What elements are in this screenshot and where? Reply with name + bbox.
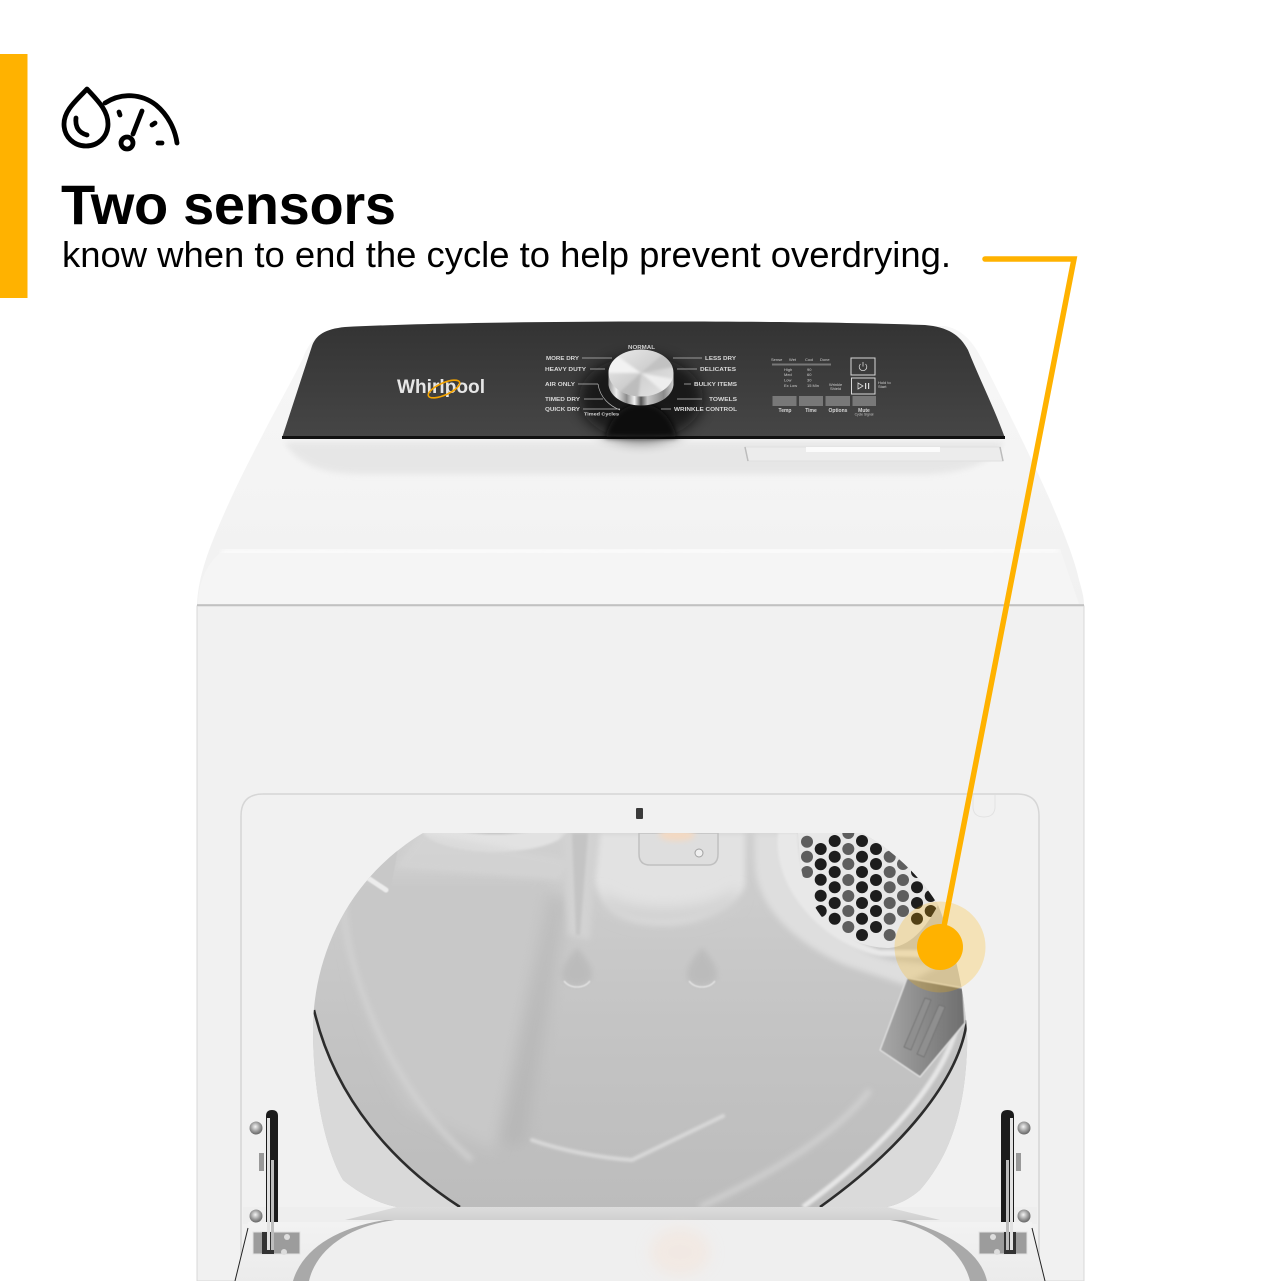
status indicators: Shield xyxy=(830,386,841,391)
option buttons: Time xyxy=(805,408,817,414)
status indicators: 60 xyxy=(807,372,812,377)
cycle labels left xyxy=(545,356,620,416)
status indicators: Cool xyxy=(805,357,813,362)
subheading text: know when to end the cycle to help prevent overdrying. xyxy=(62,234,951,275)
status indicators: 90 xyxy=(807,367,812,372)
lid glow xyxy=(650,1228,710,1276)
option buttons xyxy=(772,396,876,416)
drum lip band xyxy=(345,1207,940,1220)
right chevron arc xyxy=(700,1090,870,1207)
status indicators: Done xyxy=(820,357,830,362)
dryer illustration xyxy=(197,321,1084,1281)
door panel xyxy=(235,1222,1045,1281)
sensor tray plate xyxy=(639,833,718,865)
chevron ridge xyxy=(532,1116,723,1160)
cycle labels left: HEAVY DUTY xyxy=(545,367,586,373)
top round boss xyxy=(424,833,565,850)
cycle labels left: AIR ONLY xyxy=(545,382,575,388)
status indicators: High xyxy=(784,367,792,372)
lint lid rim xyxy=(293,1220,987,1281)
left panel shade xyxy=(350,886,490,1132)
right hinge xyxy=(979,1110,1030,1255)
dryer lid top xyxy=(197,326,1084,605)
central ridge shadow xyxy=(516,898,563,1114)
console bottom edge xyxy=(282,436,1005,439)
latch xyxy=(636,808,643,819)
status indicators: Wet xyxy=(789,357,797,362)
status indicators: Wrinkle xyxy=(829,382,843,387)
option buttons: Mute xyxy=(858,408,870,414)
cycle labels left: Timed Cycles xyxy=(584,412,620,416)
reflection slot xyxy=(745,447,1003,461)
cycle labels right: BULKY ITEMS xyxy=(694,382,737,388)
option buttons: Temp xyxy=(779,408,791,414)
lower left rim xyxy=(313,1014,458,1207)
cycle labels left: TIMED DRY xyxy=(545,397,580,403)
upper left wing xyxy=(395,833,570,880)
accent bar xyxy=(0,54,28,298)
latch tab xyxy=(973,795,995,817)
left hinge xyxy=(250,1110,300,1255)
status indicators: Low xyxy=(784,378,791,382)
cycle labels right xyxy=(661,356,738,413)
cycle labels right: LESS DRY xyxy=(705,356,736,362)
start pause button xyxy=(852,378,875,394)
vertical channels xyxy=(568,898,586,934)
moisture sensor bars xyxy=(880,978,965,1077)
lower ledge band xyxy=(243,1207,1037,1224)
door recess xyxy=(241,794,1039,1281)
status indicators: Ex Low xyxy=(784,383,797,388)
drop lifters xyxy=(564,952,590,984)
dial shadow reflection xyxy=(579,356,703,440)
control console panel xyxy=(282,321,1005,438)
lower right rim xyxy=(822,1032,967,1207)
central recess xyxy=(595,833,745,925)
status indicators: Hold to xyxy=(878,380,891,385)
dryer body front xyxy=(197,606,1084,1281)
Whirlpool logo: Whirlpool xyxy=(397,377,485,398)
power button xyxy=(851,358,875,375)
exhaust vent xyxy=(798,827,938,948)
dryer drum interior xyxy=(313,833,968,1207)
status indicators xyxy=(771,357,891,391)
status indicators: 30 xyxy=(807,378,812,382)
status indicators: 15 Min xyxy=(807,383,819,388)
drum right lighter section xyxy=(755,833,940,985)
cycle labels right: WRINKLE CONTROL xyxy=(674,407,738,413)
control dial xyxy=(608,350,674,406)
icon: water drop and gauge sensors xyxy=(64,89,177,149)
cycle labels left: QUICK DRY xyxy=(545,407,580,413)
callout halo xyxy=(894,902,986,992)
callout leader line xyxy=(940,259,1074,947)
status indicators: Sense xyxy=(771,357,783,362)
door edge lines xyxy=(235,1228,1045,1281)
lint lid xyxy=(309,1220,970,1281)
cycle labels left: MORE DRY xyxy=(546,356,579,362)
status indicators: Med xyxy=(784,372,792,377)
drum seal xyxy=(314,1010,460,1207)
heading: Two sensors xyxy=(61,173,396,236)
cycle labels right: TOWELS xyxy=(709,397,737,403)
option buttons: Options xyxy=(829,408,848,414)
status indicators: Start xyxy=(878,384,887,389)
callout dot xyxy=(917,924,963,970)
cycle labels right: DELICATES xyxy=(700,367,736,373)
option buttons: Cycle Signal xyxy=(855,412,874,416)
dial label: NORMAL xyxy=(628,345,655,351)
